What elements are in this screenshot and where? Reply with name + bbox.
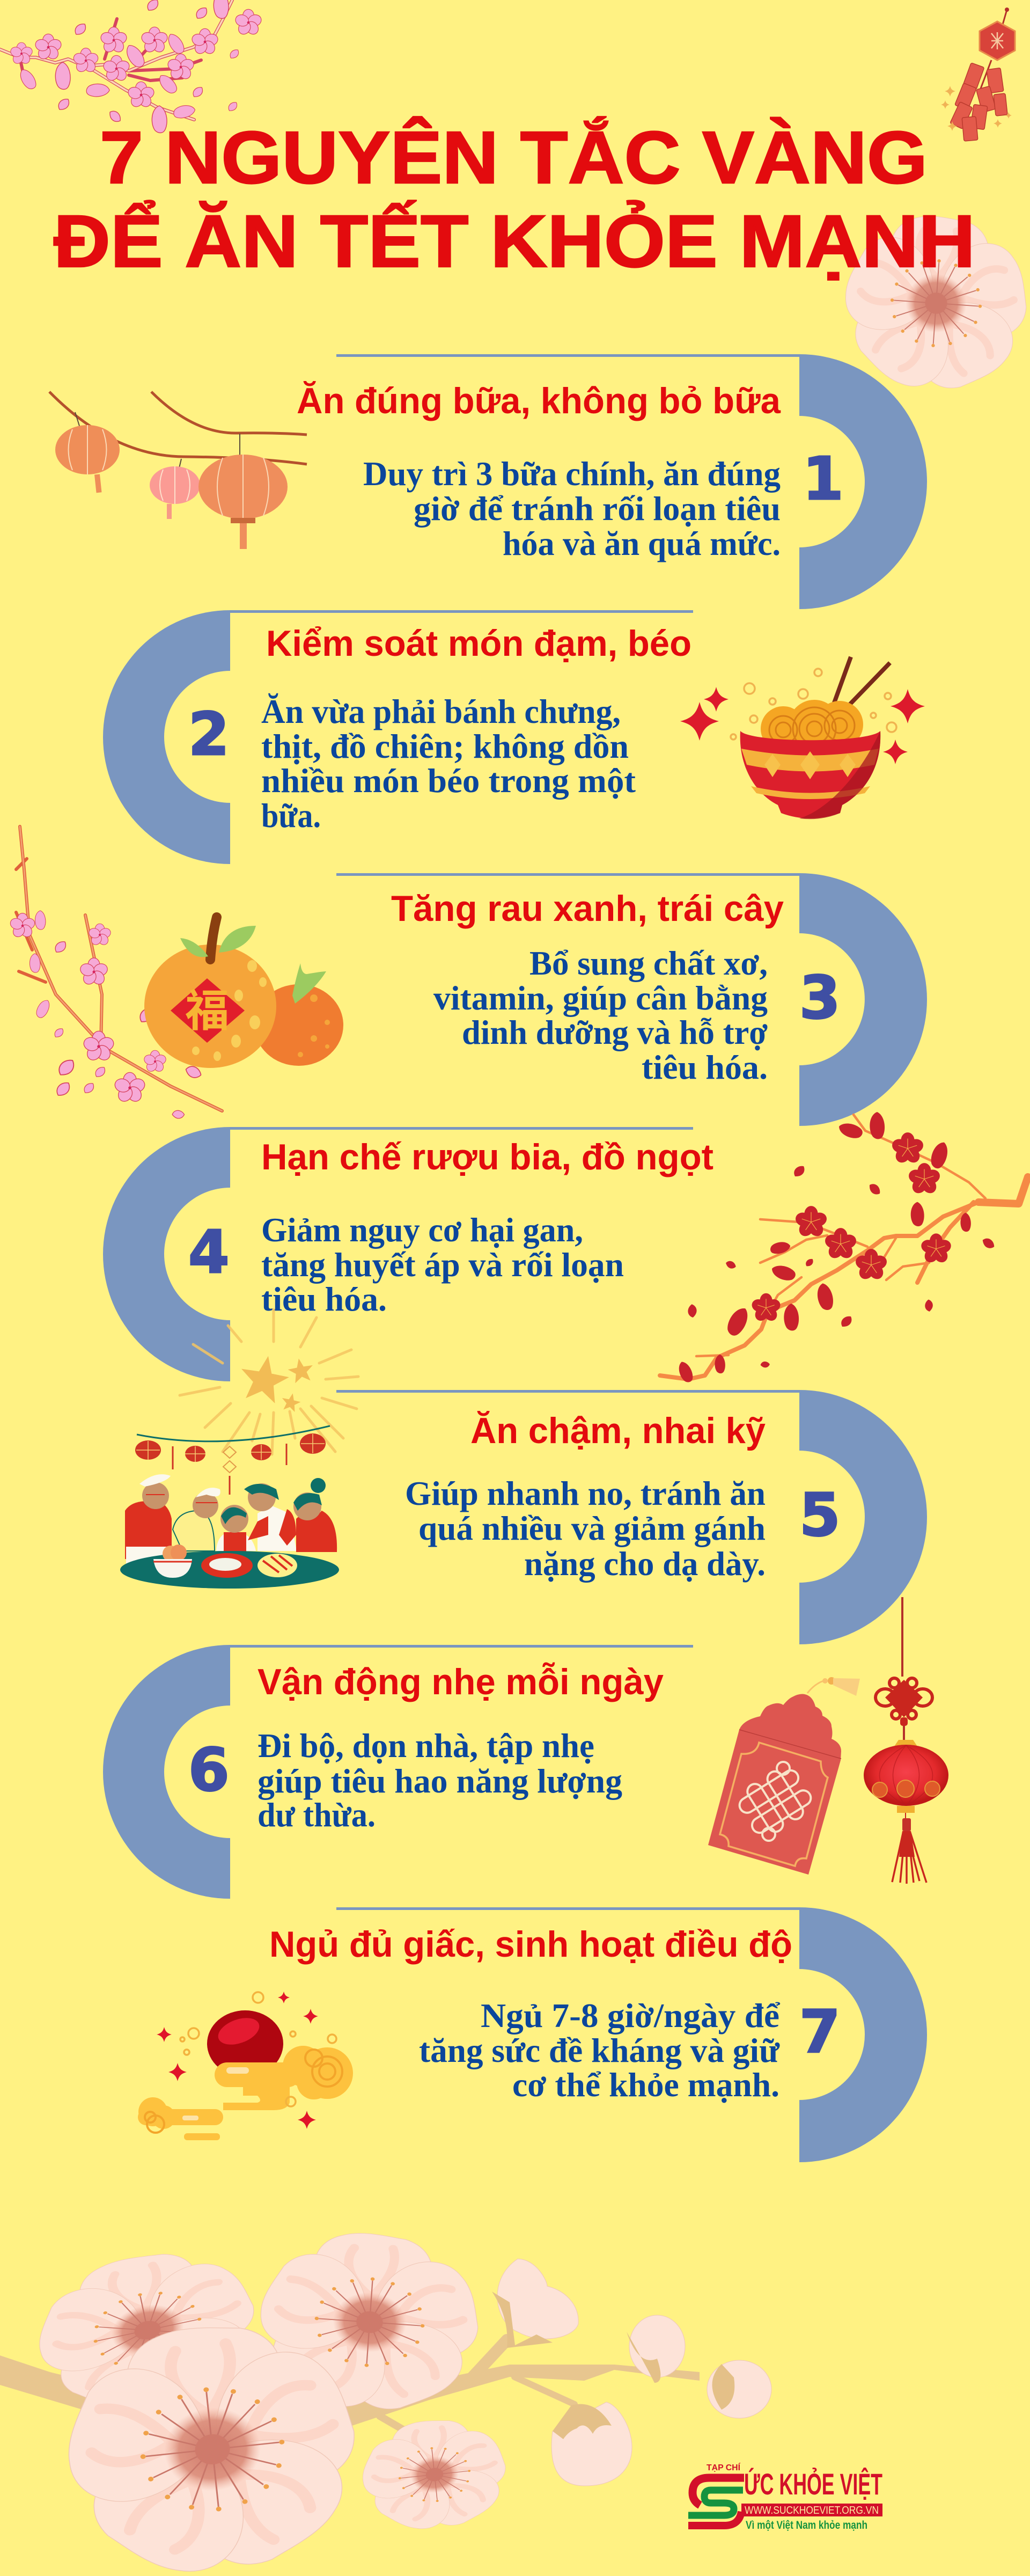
heading 6: Vận động nhẹ mỗi ngày <box>258 1662 664 1702</box>
logo <box>688 2462 882 2531</box>
hanging lantern icon <box>864 1597 948 1884</box>
number 4: 4 <box>188 1218 230 1286</box>
number 3: 3 <box>799 963 841 1032</box>
fireworks <box>180 1309 358 1454</box>
sun and clouds icon <box>138 1992 353 2140</box>
family meal icon <box>120 1426 339 1589</box>
body 2 <box>261 693 636 835</box>
body 7: cơ thể khỏe mạnh. <box>512 2066 779 2104</box>
body 5 <box>405 1475 766 1583</box>
tangerines icon <box>144 917 343 1068</box>
panel 6 <box>103 1597 948 1899</box>
body 4 <box>261 1211 624 1318</box>
number 6: 6 <box>188 1736 230 1804</box>
body 4: Giảm nguy cơ hại gan, <box>261 1211 583 1249</box>
body 1: hóa và ăn quá mức. <box>503 525 781 562</box>
flower buds <box>492 2259 771 2486</box>
body 2: nhiều món béo trong một <box>261 762 636 800</box>
logo: ỨC KHỎE VIỆT <box>744 2467 882 2501</box>
number 2: 2 <box>188 700 230 769</box>
title: ĐỂ ĂN TẾT KHỎE MẠNH <box>54 200 975 283</box>
flowers <box>14 2233 283 2437</box>
heading 3: Tăng rau xanh, trái cây <box>391 888 784 929</box>
body 3 <box>433 945 768 1086</box>
number 1: 1 <box>803 444 844 513</box>
arc 3 <box>336 873 927 1126</box>
number 5: 5 <box>799 1481 841 1549</box>
body 5: quá nhiều và giảm gánh <box>418 1510 766 1547</box>
body 4: tiêu hóa. <box>261 1280 387 1318</box>
body 1: giờ để tránh rối loạn tiêu <box>414 490 781 528</box>
body 2: bữa. <box>261 797 321 835</box>
body 1 <box>363 455 781 562</box>
heading 2: Kiểm soát món đạm, béo <box>266 623 691 664</box>
logo: WWW.SUCKHOEVIET.ORG.VN <box>745 2505 879 2516</box>
dishes <box>153 1545 297 1578</box>
title: 7 NGUYÊN TẮC VÀNG <box>100 116 928 199</box>
body 7 <box>419 1997 781 2104</box>
arc 6 <box>103 1645 693 1899</box>
body 7: tăng sức đề kháng và giữ <box>419 2032 780 2069</box>
body 6 <box>258 1727 622 1834</box>
body 7: Ngủ 7-8 giờ/ngày để <box>481 1997 781 2035</box>
body 4: tăng huyết áp và rối loạn <box>261 1246 624 1284</box>
branch <box>0 2355 700 2436</box>
logo: TẠP CHÍ <box>707 2462 741 2472</box>
heading 1: Ăn đúng bữa, không bỏ bữa <box>297 380 781 421</box>
number 7: 7 <box>799 1997 841 2066</box>
people <box>125 1474 337 1567</box>
table <box>120 1551 339 1589</box>
red blossom branch <box>660 1112 1028 1384</box>
red envelope icon <box>708 1677 860 1875</box>
blossom branch: left <box>9 826 222 1121</box>
tangerines icon: 福 <box>185 975 229 1039</box>
twigs <box>380 2340 575 2439</box>
panel 2 <box>103 610 925 864</box>
logo: Vì một Việt Nam khỏe mạnh <box>746 2519 867 2531</box>
arc 5 <box>336 1390 927 1644</box>
heading 7: Ngủ đủ giấc, sinh hoạt điều độ <box>269 1924 792 1965</box>
panel 7 <box>138 1907 927 2162</box>
heading 4: Hạn chế rượu bia, đồ ngọt <box>261 1137 713 1177</box>
arc 2 <box>103 610 693 864</box>
bunting <box>135 1426 330 1495</box>
body 3: vitamin, giúp cân bằng <box>433 979 768 1017</box>
firecrackers: top right <box>941 8 1015 141</box>
body 6: dư thừa. <box>258 1796 376 1834</box>
panel 1 <box>49 354 927 609</box>
large flower: top right <box>829 210 1030 408</box>
body 5: nặng cho dạ dày. <box>524 1545 766 1583</box>
body 2: thịt, đồ chiên; không dồn <box>261 728 629 765</box>
arc 4 <box>103 1127 693 1381</box>
body 6: Đi bộ, dọn nhà, tập nhẹ <box>258 1727 594 1765</box>
blossom branch: bottom <box>0 2226 771 2576</box>
body 3: Bổ sung chất xơ, <box>529 945 768 982</box>
panel 5 <box>120 1390 927 1644</box>
body 1: Duy trì 3 bữa chính, ăn đúng <box>363 455 781 493</box>
arc 1 <box>336 354 927 609</box>
body 3: dinh dưỡng và hỗ trợ <box>462 1014 768 1051</box>
title <box>54 116 975 283</box>
blossom branch: top left <box>0 0 263 133</box>
arc 7 <box>336 1907 927 2162</box>
body 5: Giúp nhanh no, tránh ăn <box>405 1475 766 1512</box>
body 2: Ăn vừa phải bánh chưng, <box>261 693 621 730</box>
panel 4 <box>103 1112 1028 1384</box>
panel 3 <box>9 826 927 1126</box>
body 6: giúp tiêu hao năng lượng <box>258 1762 622 1800</box>
body 3: tiêu hóa. <box>642 1049 768 1086</box>
heading 5: Ăn chậm, nhai kỹ <box>470 1410 766 1451</box>
lanterns <box>49 392 307 549</box>
noodle bowl icon <box>680 657 925 819</box>
